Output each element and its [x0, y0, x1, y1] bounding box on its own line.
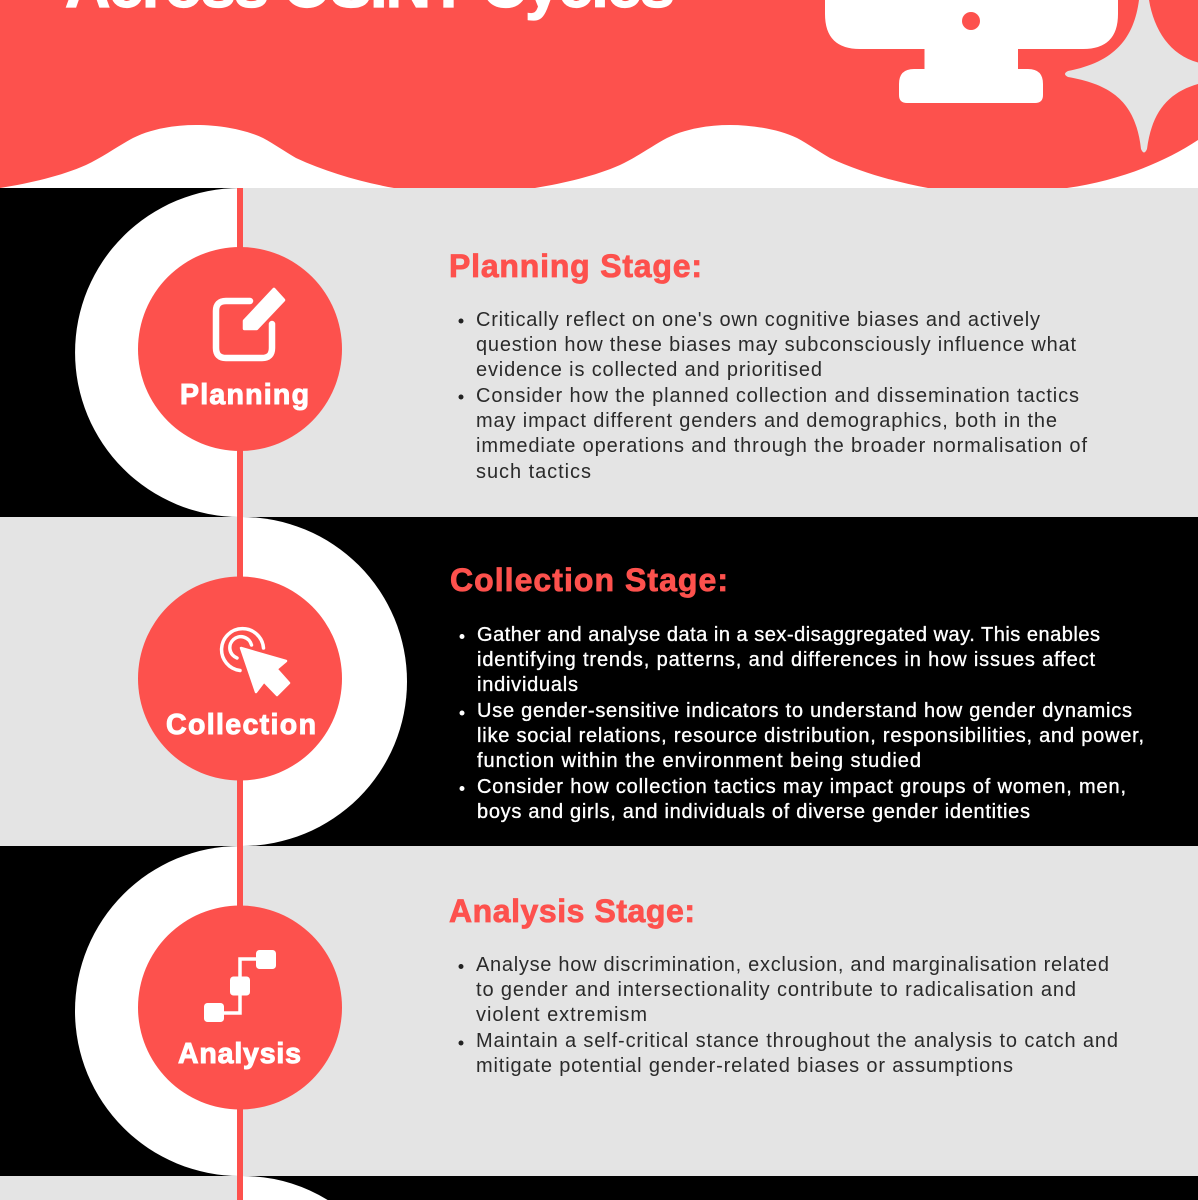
text block: planning bullets: question how these biases may subconsciously influence what — [476, 334, 1076, 356]
text block: collection bullets: identifying trends, patterns, and differences in how issues affect — [477, 649, 1095, 671]
panel: next stage, cropped — [0, 1176, 1198, 1200]
text block: planning bullets: immediate operations and through the broader normalisation of — [476, 435, 1087, 457]
stage badge: analysis — [138, 906, 342, 1110]
text block: planning bullets — [458, 309, 1087, 483]
text block: collection bullets: individuals — [477, 674, 578, 696]
text block: collection bullets: Consider how collection tactics may impact groups of women, men, — [477, 776, 1126, 798]
badge label: Collection — [166, 709, 316, 741]
text block: collection bullets: Use gender-sensitive indicators to understand how gender dynamics — [477, 700, 1132, 722]
stage badge: planning — [138, 247, 342, 451]
heading: analysis stage: Analysis Stage: — [449, 893, 695, 929]
text block: collection bullets: like social relations, resource distribution, responsibilities, and power, — [477, 725, 1144, 747]
badge label: Analysis — [178, 1038, 301, 1070]
text block: planning bullets: may impact different genders and demographics, both in the — [476, 410, 1057, 432]
panel: planning — [0, 188, 1198, 517]
icon: sparkle star — [1065, 0, 1198, 152]
text block: planning bullets: evidence is collected and prioritised — [476, 359, 822, 381]
text block: analysis bullets: Maintain a self-critical stance throughout the analysis to catch and — [476, 1030, 1118, 1052]
text block: collection bullets: function within the environment being studied — [477, 750, 921, 772]
text block: collection bullets: boys and girls, and individuals of diverse gender identities — [477, 801, 1030, 823]
heading: planning stage: Planning Stage: — [449, 248, 702, 284]
text block: analysis bullets: to gender and intersectionality contribute to radicalisation and — [476, 979, 1076, 1001]
stage badge: collection — [138, 576, 342, 780]
header banner — [0, 0, 1198, 188]
text block: collection bullets: Gather and analyse data in a sex-disaggregated way. This enables — [477, 624, 1100, 646]
icon: flow nodes — [204, 950, 276, 1022]
icon: edit pencil — [216, 290, 284, 358]
text block: planning bullets: Critically reflect on one's own cognitive biases and actively — [476, 309, 1040, 331]
timeline line — [237, 188, 243, 1200]
text block: analysis bullets: Analyse how discrimination, exclusion, and marginalisation related — [476, 954, 1109, 976]
heading: collection stage: Collection Stage: — [450, 562, 728, 598]
panel: collection — [0, 517, 1198, 846]
panel: analysis — [0, 846, 1198, 1176]
text block: collection bullets — [460, 624, 1144, 823]
text block: analysis bullets — [458, 954, 1118, 1077]
text block: planning bullets: such tactics — [476, 461, 591, 483]
badge label: Planning — [180, 379, 309, 411]
text block: analysis bullets: violent extremism — [476, 1004, 647, 1026]
text block: analysis bullets: mitigate potential gender-related biases or assumptions — [476, 1055, 1013, 1077]
text block: planning bullets: Consider how the planned collection and dissemination tactics — [476, 385, 1079, 407]
icon: click cursor — [222, 629, 289, 695]
icon: monitor — [825, 0, 1118, 103]
